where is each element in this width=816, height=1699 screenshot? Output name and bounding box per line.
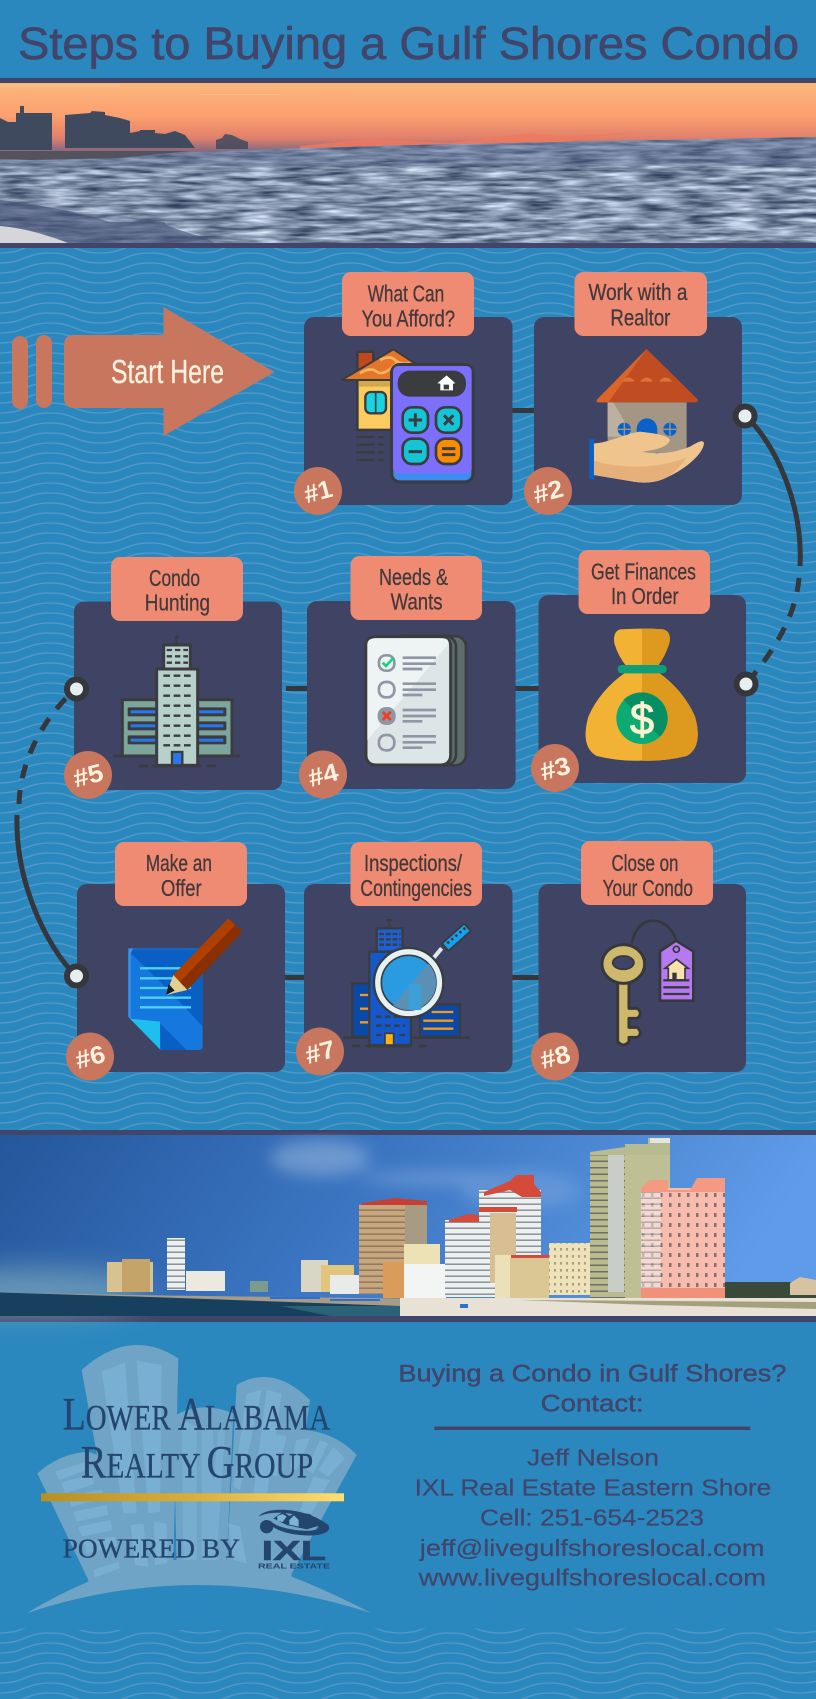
title: Steps to Buying a Gulf Shores Condo xyxy=(18,18,799,69)
badge #2 xyxy=(524,467,572,515)
arrow tail bars xyxy=(12,335,52,409)
logo: IXL Real Estate xyxy=(258,1510,330,1571)
label: What Can You Afford? xyxy=(342,272,474,336)
label: Close on Your Condo: Your Condo xyxy=(603,875,693,901)
logo skyline watermark xyxy=(27,1345,372,1630)
badge #6 xyxy=(66,1032,114,1080)
label: Condo Hunting xyxy=(111,557,243,621)
label: Needs & Wants: Wants xyxy=(391,588,443,614)
icon: document and pencil xyxy=(128,918,243,1050)
gold divider xyxy=(41,1493,344,1501)
label: Condo Hunting: Hunting xyxy=(145,590,210,616)
badge #3: #3 xyxy=(537,752,573,786)
icon: house in a hand xyxy=(589,349,704,483)
label: Work with a Realtor: Work with a xyxy=(588,279,688,305)
start here arrow: Start Here xyxy=(111,353,224,390)
logo: Lower Alabama Realty Group: POWERED BY xyxy=(63,1534,240,1564)
start here arrow xyxy=(12,307,274,436)
badge #7 xyxy=(296,1028,344,1076)
icon: house and calculator xyxy=(342,349,473,482)
badge #5: #5 xyxy=(70,759,106,793)
step 1 panel: What Can You Afford? xyxy=(294,272,512,515)
label: What Can You Afford?: You Afford? xyxy=(362,306,455,332)
icon: checklist xyxy=(366,636,466,765)
badge #6: #6 xyxy=(72,1040,108,1075)
label: Get Finances In Order xyxy=(579,550,710,614)
shore palms and houses xyxy=(725,1282,816,1305)
tall olive tower xyxy=(590,1152,670,1300)
step 7 panel: Inspections/Contingencies xyxy=(296,842,512,1076)
label: Make an Offer: Offer xyxy=(161,875,202,901)
label: Get Finances In Order: Get Finances xyxy=(591,558,696,584)
contact heading xyxy=(398,1360,786,1418)
badge #1: #1 xyxy=(301,475,335,509)
contact heading: Buying a Condo in Gulf Shores? xyxy=(398,1360,786,1387)
label: Needs & Wants xyxy=(350,556,482,620)
step 2 panel: Work with a Realtor xyxy=(524,272,742,515)
label: Make an Offer: Make an xyxy=(146,850,212,876)
icon: key with tag xyxy=(602,921,693,1045)
logo: IXL Real Estate: REAL ESTATE xyxy=(258,1562,330,1571)
badge #8 xyxy=(531,1032,579,1080)
contact details: Cell: 251-654-2523 xyxy=(480,1504,704,1530)
badge #4 xyxy=(299,750,347,798)
photo: sunset over the Gulf with condo skyline xyxy=(0,78,816,248)
path arrow: right curve from step 2 to step 3 xyxy=(736,406,800,694)
label: Inspections/Contingencies: Contingencies xyxy=(360,875,472,901)
badge #8: #8 xyxy=(537,1040,573,1075)
label: Inspections/Contingencies xyxy=(350,842,482,906)
badge #4: #4 xyxy=(305,758,341,793)
logo: Lower Alabama Realty Group: REALTY GROUP xyxy=(81,1437,313,1489)
label: Get Finances In Order: In Order xyxy=(611,583,679,609)
label: What Can You Afford?: What Can xyxy=(368,280,444,306)
photo: Gulf Shores beach condos xyxy=(0,1130,816,1322)
badge #3 xyxy=(531,744,579,792)
label: Make an Offer xyxy=(115,842,247,906)
contact heading: Contact: xyxy=(541,1391,644,1418)
contact details: www.livegulfshoreslocal.com xyxy=(418,1564,766,1590)
pink tower xyxy=(641,1188,725,1302)
label: Close on Your Condo xyxy=(581,841,713,905)
icon: money bag xyxy=(586,629,698,761)
badge #7: #7 xyxy=(302,1035,338,1070)
logo: Lower Alabama Realty Group xyxy=(27,1345,372,1630)
label: Close on Your Condo: Close on xyxy=(612,850,678,876)
far towers xyxy=(107,1262,153,1292)
icon: condo tower xyxy=(113,635,240,766)
step 8 panel: Close on Your Condo xyxy=(531,841,746,1080)
path arrow: left curve from step 5 to step 6 xyxy=(17,680,86,986)
step 3 panel: Get Finances In Order xyxy=(531,550,746,792)
connectors between cards xyxy=(283,408,540,980)
contact details: Jeff Nelson xyxy=(527,1444,659,1470)
label: Work with a Realtor xyxy=(574,272,707,336)
label: Work with a Realtor: Realtor xyxy=(610,304,671,330)
icon: magnifying glass over buildings xyxy=(343,920,471,1046)
tan tower xyxy=(359,1204,427,1294)
badge #1 xyxy=(294,467,342,515)
logo: IXL Real Estate: IXL xyxy=(262,1535,326,1566)
label: Condo Hunting: Condo xyxy=(149,565,200,591)
badge #2: #2 xyxy=(530,475,566,509)
step 5 panel: Condo Hunting xyxy=(64,557,282,799)
white and beige towers xyxy=(445,1220,479,1297)
icon: money bag: $ xyxy=(630,696,654,744)
label: Inspections/Contingencies: Inspections/ xyxy=(364,850,462,876)
badge #5 xyxy=(64,751,112,799)
contact details xyxy=(415,1444,771,1590)
step 6 panel: Make an Offer xyxy=(66,842,285,1080)
step 4 panel: Needs & Wants xyxy=(299,556,516,798)
logo: Lower Alabama Realty Group: LOWER ALABAMA xyxy=(63,1388,330,1440)
label: Needs & Wants: Needs & xyxy=(379,564,448,590)
contact details: IXL Real Estate Eastern Shore xyxy=(415,1474,771,1500)
contact details: jeff@livegulfshoreslocal.com xyxy=(419,1535,765,1561)
